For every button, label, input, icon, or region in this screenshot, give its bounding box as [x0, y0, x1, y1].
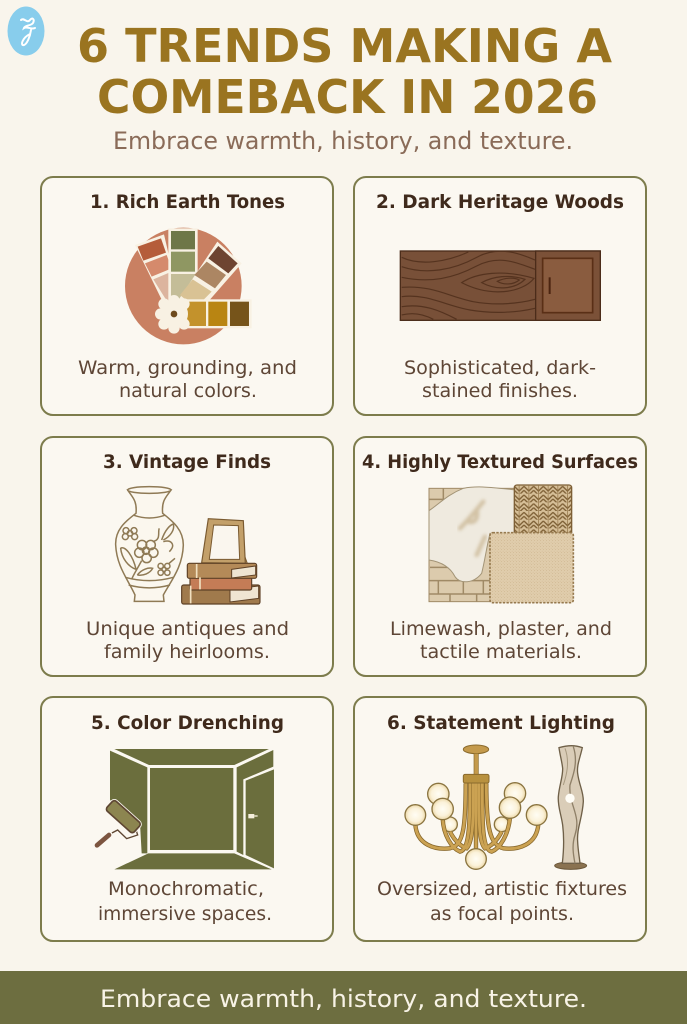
description: rich earth tones: natural colors. [119, 380, 257, 402]
panel: statement lighting [354, 697, 646, 941]
description: vintage finds: Unique antiques and [86, 618, 289, 640]
footer banner: Embrace warmth, history, and texture. [100, 985, 587, 1013]
icon: vase, frame and books [116, 487, 260, 604]
footer banner [0, 971, 687, 1024]
icon: chandelier [405, 745, 547, 869]
title [77, 19, 612, 124]
heading: dark heritage woods: 2. Dark Heritage Woods [376, 191, 624, 213]
icon: olive room with paint roller [97, 749, 274, 869]
description: color drenching: Monochromatic, [108, 878, 264, 900]
icon: plaster, knit and boucle swatches [429, 485, 573, 603]
heading: statement lighting: 6. Statement Lighting [387, 712, 615, 734]
heading: vintage finds: 3. Vintage Finds [103, 451, 271, 473]
icon: floor lamp [555, 746, 587, 869]
description: vintage finds [86, 618, 289, 663]
description: color drenching [98, 878, 272, 925]
panel: highly textured surfaces [354, 437, 646, 676]
description: color drenching: immersive spaces. [98, 903, 272, 925]
logo badge [8, 6, 44, 56]
description: rich earth tones [78, 357, 297, 402]
heading: rich earth tones: 1. Rich Earth Tones [90, 191, 285, 213]
icon: colour fan [125, 228, 252, 344]
description: vintage finds: family heirlooms. [104, 641, 270, 663]
icon: paint roller [97, 799, 141, 845]
title: 6 TRENDS MAKING A [77, 19, 612, 73]
icon: chandelier and floor lamp [405, 745, 587, 869]
description: highly textured surfaces: Limewash, plaster, and [390, 618, 612, 640]
icon: wood panel and cabinet [400, 251, 600, 320]
description: dark heritage woods: stained finishes. [422, 380, 578, 402]
heading: highly textured surfaces: 4. Highly Textured Surfaces [362, 451, 638, 473]
heading: color drenching: 5. Color Drenching [91, 712, 284, 734]
panel: color drenching [41, 697, 333, 941]
title: COMEBACK IN 2026 [97, 70, 598, 124]
description: dark heritage woods: Sophisticated, dark- [404, 357, 596, 379]
description: dark heritage woods [404, 357, 596, 402]
description: statement lighting: as focal points. [430, 903, 574, 925]
panel: vintage finds [41, 437, 333, 676]
subtitle: Embrace warmth, history, and texture. [113, 127, 573, 155]
description: statement lighting [377, 878, 627, 925]
panel: rich earth tones [41, 177, 333, 415]
description: statement lighting: Oversized, artistic fixtures [377, 878, 627, 900]
panel: dark heritage woods [354, 177, 646, 415]
description: highly textured surfaces [390, 618, 612, 663]
description: highly textured surfaces: tactile materials. [420, 641, 582, 663]
description: rich earth tones: Warm, grounding, and [78, 357, 297, 379]
